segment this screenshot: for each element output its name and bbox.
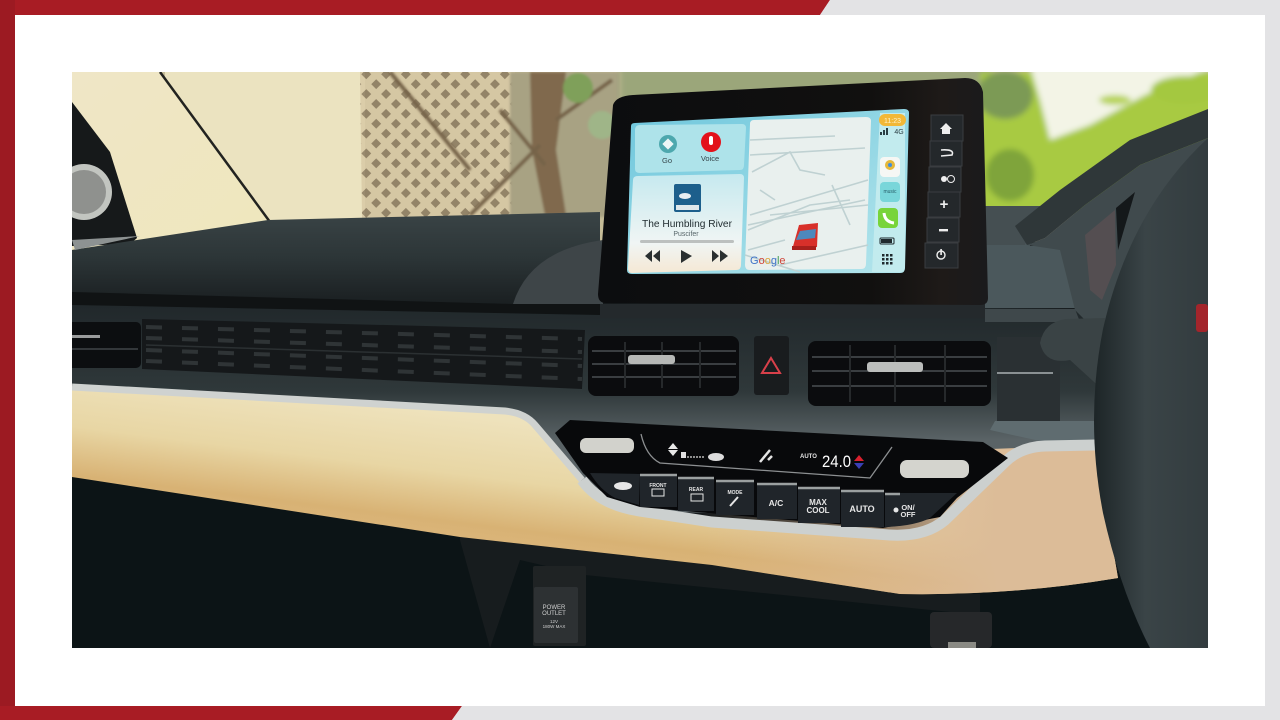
centre vent left <box>588 336 739 396</box>
music card: The Humbling River <box>642 219 733 230</box>
go / voice card: Voice <box>701 154 719 163</box>
display icons <box>641 434 892 478</box>
frame: right grey bar <box>1265 0 1280 720</box>
bezel <box>598 78 988 305</box>
dock <box>872 113 906 272</box>
button labels: A/C <box>769 498 783 508</box>
temperature readout: AUTO <box>800 454 817 460</box>
go / voice card <box>635 124 746 173</box>
left slider knob <box>580 438 634 453</box>
button labels: COOL <box>806 506 830 515</box>
map card: Google <box>750 255 786 267</box>
speaker <box>72 164 112 220</box>
music card: Puscifer <box>673 231 699 238</box>
frame: bottom grey bar <box>452 706 1280 720</box>
screen <box>620 105 915 280</box>
climate control panel: 24.0 <box>822 452 851 471</box>
buttons row <box>590 473 957 527</box>
button labels: ON/ <box>901 503 916 512</box>
lower dash dark area <box>72 470 1150 648</box>
power outlet: 180W MAX <box>543 624 565 629</box>
frame: left red bar <box>0 0 15 720</box>
side buttons <box>925 115 963 268</box>
dark pillar base <box>72 102 137 246</box>
button labels: AUTO <box>849 504 875 514</box>
button labels <box>614 482 916 519</box>
dash top right <box>985 206 1078 308</box>
speaker grille <box>142 319 585 389</box>
photo: car dashboard <box>56 66 1220 648</box>
climate control panel <box>555 420 1008 528</box>
frame: bottom red bar <box>0 706 462 720</box>
power outlet: 12V <box>550 619 558 624</box>
go / voice card: Go <box>662 156 672 165</box>
hazard button <box>754 336 789 395</box>
music card <box>628 174 744 273</box>
infotainment unit <box>598 78 988 305</box>
steering wheel <box>1094 138 1208 648</box>
power outlet: POWER <box>543 605 566 611</box>
button labels: MAX <box>809 498 828 507</box>
red car <box>792 223 818 250</box>
power outlet <box>533 566 586 646</box>
frame: top grey bar <box>820 0 1280 15</box>
button labels: FRONT <box>649 483 667 489</box>
stalk <box>1040 318 1103 383</box>
side buttons: + <box>940 196 949 213</box>
dock: 11:23 <box>884 118 901 125</box>
frame: top red bar <box>0 0 830 15</box>
power outlet: OUTLET <box>542 611 566 617</box>
button labels: MODE <box>728 490 743 496</box>
right slider knob <box>900 460 969 478</box>
background: outside view <box>162 72 1208 242</box>
dash top surface <box>72 212 603 304</box>
map card <box>745 117 871 272</box>
left vent <box>66 322 141 368</box>
album art <box>674 184 701 212</box>
chrome trim <box>72 387 1095 535</box>
button labels: OFF <box>900 510 916 519</box>
beige lower dash <box>72 388 1118 594</box>
door trim and vent surround <box>1015 109 1208 335</box>
left A-pillar <box>72 72 270 250</box>
dock: 4G <box>894 129 904 136</box>
dock: music <box>883 189 897 195</box>
centre vent right <box>808 341 991 406</box>
mid band <box>72 292 1100 520</box>
usb port <box>930 612 992 648</box>
button labels: REAR <box>689 487 703 493</box>
